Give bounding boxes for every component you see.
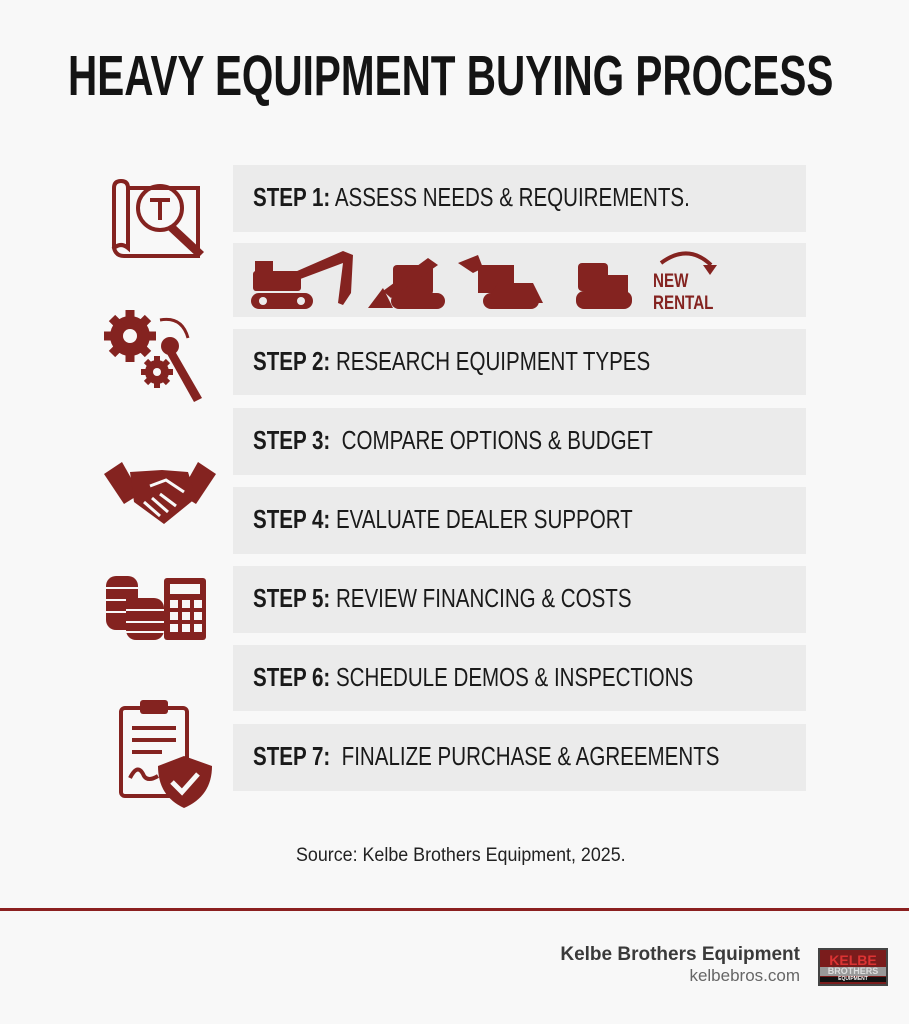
icon: handshake xyxy=(104,462,216,524)
new rental: RENTAL xyxy=(653,291,713,313)
footer text xyxy=(560,944,800,985)
footer text: kelbebros.com xyxy=(689,966,800,985)
step 6 bar xyxy=(233,645,806,711)
divider xyxy=(0,908,909,911)
new rental: NEW xyxy=(653,269,689,291)
step 3 bar xyxy=(233,408,806,475)
logo: EQUIPMENT xyxy=(838,976,868,982)
logo xyxy=(818,948,888,986)
new rental xyxy=(653,253,717,313)
icon: clipboard and shield xyxy=(119,700,212,808)
step 5 bar xyxy=(233,566,806,633)
source: Source: Kelbe Brothers Equipment, 2025. xyxy=(296,845,626,866)
step 6 bar: STEP 6: SCHEDULE DEMOS & INSPECTIONS xyxy=(253,662,693,692)
small dozer xyxy=(576,263,632,309)
equipment bar xyxy=(233,243,806,317)
title: HEAVY EQUIPMENT BUYING PROCESS xyxy=(68,44,833,108)
logo: BROTHERS xyxy=(828,966,878,976)
excavator xyxy=(251,251,353,309)
icon: coins and calculator xyxy=(106,576,206,640)
logo: KELBE xyxy=(829,952,877,968)
step 1 bar xyxy=(233,165,806,232)
step 3 bar: STEP 3: COMPARE OPTIONS & BUDGET xyxy=(253,425,653,455)
step 7 bar xyxy=(233,724,806,791)
dozer xyxy=(458,255,543,309)
icon: blueprint magnifier xyxy=(112,179,204,258)
step 2 bar: STEP 2: RESEARCH EQUIPMENT TYPES xyxy=(253,346,650,376)
step 2 bar xyxy=(233,329,806,395)
footer text: Kelbe Brothers Equipment xyxy=(560,944,800,965)
step 7 bar: STEP 7: FINALIZE PURCHASE & AGREEMENTS xyxy=(253,741,719,771)
step 1 bar: STEP 1: ASSESS NEEDS & REQUIREMENTS. xyxy=(253,182,690,212)
icon: gears and wrench xyxy=(104,310,202,402)
skid loader xyxy=(368,258,445,309)
step 5 bar: STEP 5: REVIEW FINANCING & COSTS xyxy=(253,583,632,613)
step 4 bar: STEP 4: EVALUATE DEALER SUPPORT xyxy=(253,504,633,534)
step 4 bar xyxy=(233,487,806,554)
